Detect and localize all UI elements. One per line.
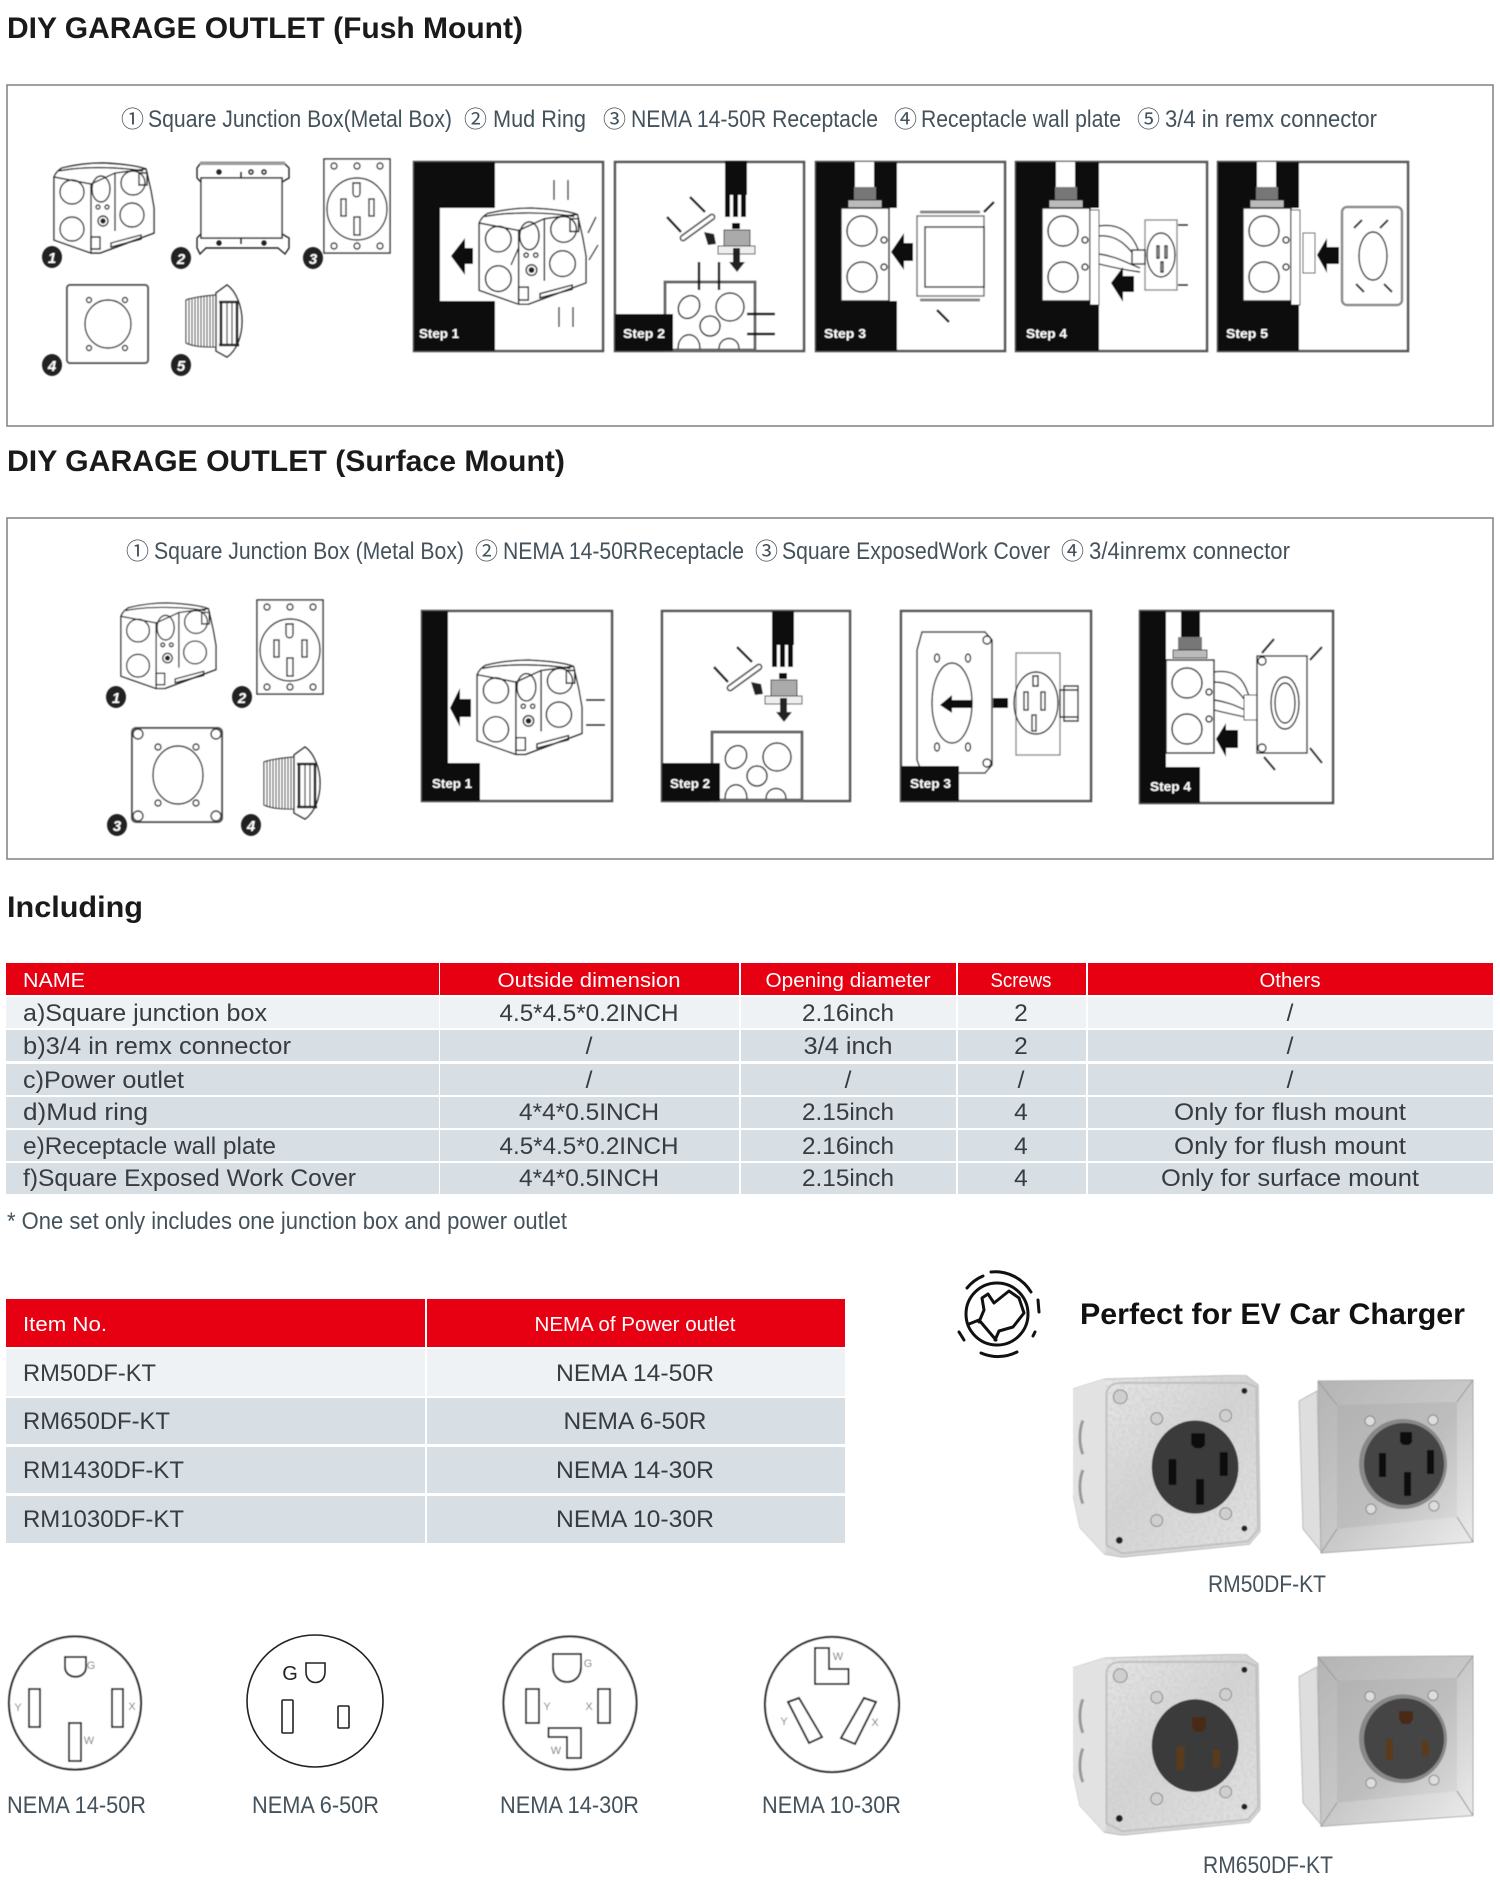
parts illustrations: flush mount: 4 [47, 358, 57, 375]
diagram: NEMA 14-50R: X [128, 1701, 136, 1713]
table: parts: 4 [1014, 1165, 1028, 1192]
table: parts: c)Power outlet [23, 1067, 184, 1094]
step 3: flush mount [816, 162, 1005, 351]
label: NEMA 14-50R: NEMA 14-50R [7, 1792, 146, 1819]
table: item numbers: NEMA 14-50R [556, 1360, 714, 1387]
parts legend: surface mount: Square Junction Box (Metal Box) [154, 538, 464, 565]
step 3: flush mount: Step 3 [824, 326, 866, 341]
table: parts: 2.16inch [802, 1133, 894, 1160]
parts illustrations: surface mount: 1 [112, 690, 120, 707]
step 3: surface mount [901, 611, 1091, 801]
parts legend: surface mount: Square ExposedWork Cover [782, 538, 1050, 565]
table: parts: / [1018, 1067, 1025, 1094]
diagram: NEMA 6-50R: G [282, 1663, 298, 1685]
table: parts: Screws [990, 970, 1052, 992]
parts legend: flush mount: Square Junction Box(Metal Box) [148, 106, 452, 133]
diagram: NEMA 10-30R: X [871, 1717, 879, 1729]
parts illustrations: surface mount [106, 600, 323, 836]
table: item numbers: RM1030DF-KT [23, 1506, 184, 1533]
parts legend: flush mount: ② [464, 100, 487, 134]
table: parts [6, 963, 1493, 1194]
parts legend: flush mount: Receptacle wall plate [921, 106, 1121, 133]
title: surface mount: DIY GARAGE OUTLET (Surface Mount) [7, 445, 565, 478]
diagram: NEMA 14-30R: G [584, 1658, 592, 1670]
table: parts: d)Mud ring [23, 1099, 148, 1126]
step 1: surface mount [422, 611, 612, 801]
table: item numbers: NEMA 14-30R [556, 1457, 714, 1484]
parts legend: flush mount: ① [121, 100, 144, 134]
diagram: NEMA 10-30R: W [833, 1651, 844, 1663]
parts legend: flush mount: ④ [894, 100, 917, 134]
step 1: flush mount: Step 1 [419, 326, 459, 341]
parts legend: surface mount: ② [475, 532, 498, 566]
diagram: NEMA 14-30R: Y [543, 1701, 551, 1713]
diagram: NEMA 14-50R [9, 1636, 141, 1770]
step 4: flush mount: Step 4 [1026, 326, 1068, 341]
photo: RM650DF-KT junction box [1073, 1654, 1260, 1835]
diagram: NEMA 14-50R: Y [14, 1702, 22, 1714]
step 5: flush mount: Step 5 [1226, 326, 1268, 341]
table: parts: / [1287, 1000, 1294, 1027]
parts legend: surface mount: NEMA 14-50RReceptacle [503, 538, 744, 565]
diagram: NEMA 10-30R: Y [780, 1716, 788, 1728]
parts illustrations: surface mount: 3 [113, 818, 122, 835]
label: RM650DF-KT: RM650DF-KT [1203, 1852, 1333, 1879]
diagram: NEMA 14-30R [504, 1636, 636, 1770]
parts illustrations: flush mount: 1 [48, 250, 56, 267]
step 4: surface mount [1140, 611, 1333, 803]
parts legend: surface mount: 3/4inremx connector [1089, 538, 1290, 565]
table: parts: 2 [1014, 1000, 1028, 1027]
parts illustrations: flush mount: 5 [177, 358, 186, 375]
table: item numbers: NEMA 6-50R [564, 1408, 706, 1435]
step 5: flush mount [1218, 162, 1408, 351]
diagram: NEMA 6-50R [247, 1635, 383, 1767]
step 1: flush mount [414, 162, 603, 351]
table: parts: / [586, 1067, 593, 1094]
parts legend: surface mount: ④ [1061, 532, 1084, 566]
table: parts: 2.15inch [802, 1165, 894, 1192]
parts illustrations: flush mount: 2 [176, 251, 186, 268]
photo: RM650DF-KT wall plate [1299, 1656, 1473, 1826]
table: parts: Only for flush mount [1174, 1099, 1406, 1126]
diagram: NEMA 10-30R [765, 1637, 899, 1772]
step 3: surface mount: Step 3 [910, 776, 951, 791]
table: parts: Opening diameter [766, 970, 931, 992]
table: parts: / [1287, 1033, 1294, 1060]
table: parts: Only for flush mount [1174, 1133, 1406, 1160]
table: parts: Only for surface mount [1161, 1165, 1419, 1192]
table: parts: 4*4*0.5INCH [519, 1165, 659, 1192]
footnote: * One set only includes one junction box and power outlet [7, 1208, 567, 1235]
step 1: surface mount: Step 1 [432, 776, 472, 791]
table: parts: 2.16inch [802, 1000, 894, 1027]
table: parts: Others [1260, 970, 1320, 992]
diagram: NEMA 14-50R: W [84, 1735, 95, 1747]
step 4: surface mount: Step 4 [1150, 779, 1192, 794]
table: item numbers: RM650DF-KT [23, 1408, 170, 1435]
panel: surface mount [7, 518, 1493, 859]
table: parts: 4 [1014, 1099, 1028, 1126]
table: parts: b)3/4 in remx connector [23, 1033, 291, 1060]
table: parts: Outside dimension [498, 970, 680, 992]
parts illustrations: surface mount: 4 [246, 818, 256, 835]
table: parts: 4.5*4.5*0.2INCH [500, 1133, 678, 1160]
table: parts: 4*4*0.5INCH [519, 1099, 659, 1126]
parts illustrations: flush mount [42, 159, 390, 376]
parts legend: flush mount [121, 100, 1377, 134]
heading: including: Including [7, 891, 143, 924]
step 2: surface mount [662, 611, 850, 801]
table: parts: 2 [1014, 1033, 1028, 1060]
table: parts: NAME [23, 970, 85, 992]
table: parts: a)Square junction box [23, 1000, 267, 1027]
table: item numbers: RM50DF-KT [23, 1360, 156, 1387]
table: parts: / [586, 1033, 593, 1060]
heading: perfect for EV car charger: Perfect for EV Car Charger [1080, 1298, 1465, 1331]
label: RM50DF-KT: RM50DF-KT [1208, 1571, 1326, 1598]
step 4: flush mount [1016, 162, 1207, 351]
parts legend: flush mount: NEMA 14-50R Receptacle [631, 106, 878, 133]
parts illustrations: flush mount: 3 [309, 251, 318, 268]
label: NEMA 6-50R: NEMA 6-50R [252, 1792, 379, 1819]
label: NEMA 10-30R: NEMA 10-30R [762, 1792, 901, 1819]
label: NEMA 14-30R: NEMA 14-30R [500, 1792, 639, 1819]
panel: flush mount [7, 85, 1493, 426]
parts illustrations: surface mount: 2 [237, 690, 247, 707]
step 2: flush mount: Step 2 [623, 326, 665, 341]
table: parts: / [845, 1067, 852, 1094]
diagram: NEMA 14-30R: X [585, 1701, 593, 1713]
step 2: flush mount [615, 161, 804, 351]
table: item numbers: NEMA 10-30R [556, 1506, 714, 1533]
table: parts: e)Receptacle wall plate [23, 1133, 276, 1160]
parts legend: surface mount: ③ [755, 532, 778, 566]
table: item numbers: Item No. [23, 1314, 107, 1336]
step 2: surface mount: Step 2 [670, 776, 710, 791]
parts legend: surface mount [126, 532, 1290, 566]
icon: thumbs up badge [959, 1272, 1039, 1357]
diagram: NEMA 14-50R: G [87, 1660, 95, 1672]
table: parts: / [1287, 1067, 1294, 1094]
table: item numbers: RM1430DF-KT [23, 1457, 184, 1484]
parts legend: surface mount: ① [126, 532, 149, 566]
table: item numbers [6, 1299, 845, 1543]
parts legend: flush mount: 3/4 in remx connector [1165, 106, 1377, 133]
parts legend: flush mount: Mud Ring [493, 106, 586, 133]
title: flush mount: DIY GARAGE OUTLET (Fush Mount) [7, 12, 523, 45]
diagram: NEMA 14-30R: W [551, 1745, 562, 1757]
parts legend: flush mount: ⑤ [1137, 100, 1160, 134]
photo: RM50DF-KT junction box [1073, 1375, 1260, 1557]
table: parts: 4 [1014, 1133, 1028, 1160]
table: item numbers: NEMA of Power outlet [534, 1314, 736, 1336]
table: parts: 4.5*4.5*0.2INCH [500, 1000, 678, 1027]
photo: RM50DF-KT wall plate [1299, 1380, 1473, 1553]
table: parts: 3/4 inch [804, 1033, 892, 1060]
parts legend: flush mount: ③ [603, 100, 626, 134]
table: parts: f)Square Exposed Work Cover [23, 1165, 356, 1192]
table: parts: 2.15inch [802, 1099, 894, 1126]
